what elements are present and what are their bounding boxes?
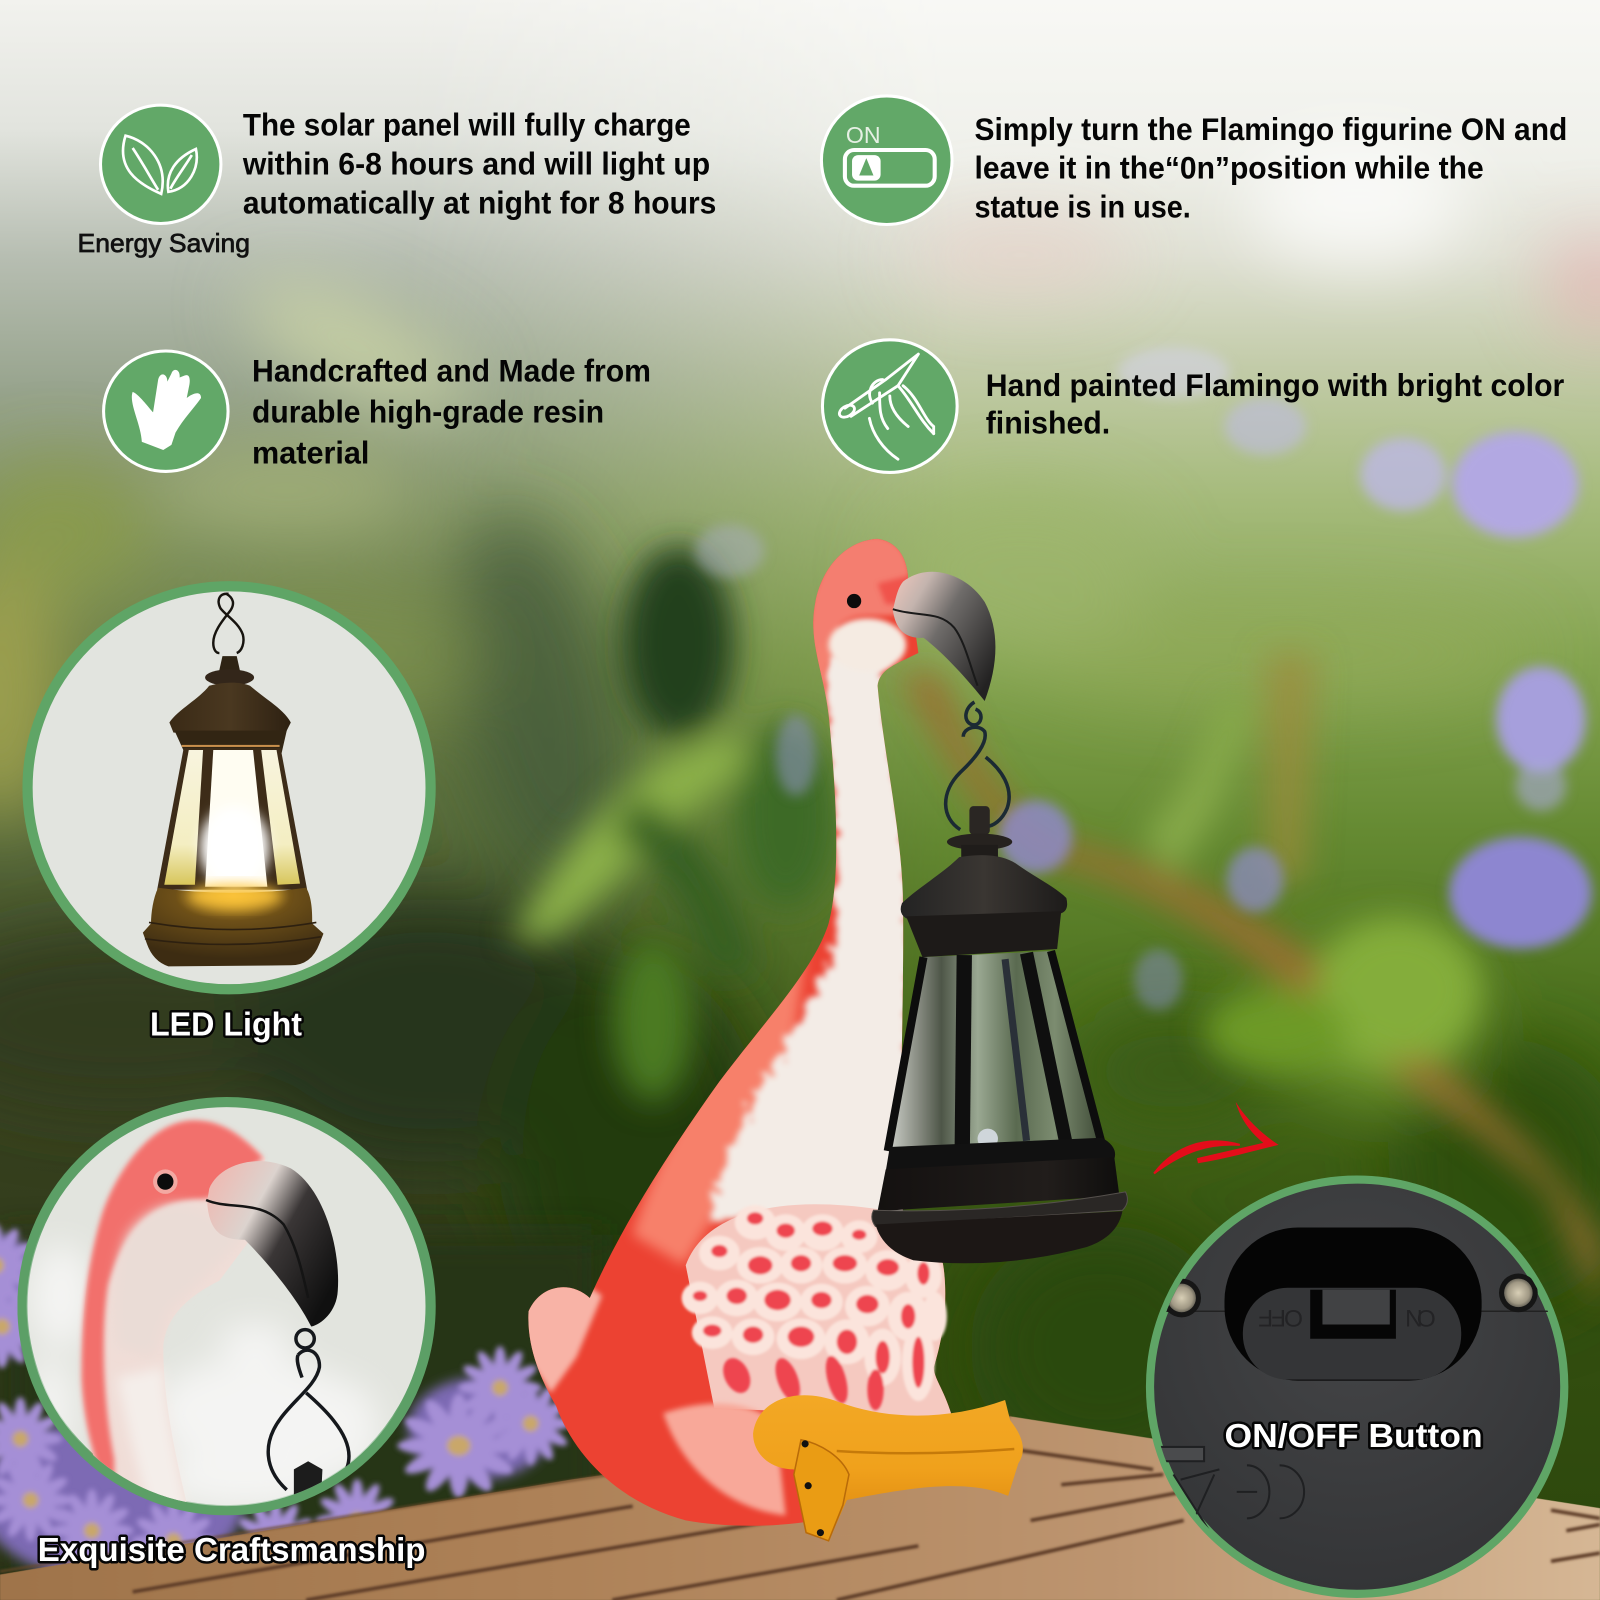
icon: glove: [104, 351, 228, 471]
handcrafted text: [252, 353, 651, 470]
handcrafted text: durable high-grade resin: [252, 393, 604, 429]
thigh: [663, 1403, 786, 1515]
neck and head: [84, 1150, 265, 1502]
hand painted text: finished.: [986, 405, 1110, 441]
icon: on switch: [821, 96, 952, 224]
icon: on switch: ON: [846, 122, 881, 148]
feature: on switch: [821, 96, 1567, 224]
icon: leaves: [101, 105, 221, 223]
solar charge text: The solar panel will fully charge: [243, 107, 691, 143]
wooden table: [0, 1416, 1600, 1600]
Energy Saving caption: Energy Saving: [78, 230, 250, 258]
CE mark and battery marks: [1158, 1447, 1304, 1531]
screws: [1166, 1278, 1201, 1318]
on switch text: statue is in use.: [974, 188, 1191, 224]
beak close-up: [207, 1161, 338, 1327]
flowers behind table: [0, 1223, 602, 1583]
feature: energy saving: [78, 105, 716, 258]
wing base: [686, 1204, 954, 1418]
mirrored OFF and ON marks: OFF: [1258, 1304, 1303, 1331]
eye: [847, 594, 861, 608]
flamingo statue: [510, 531, 1023, 1541]
solar charge text: within 6-8 hours and will light up: [242, 145, 710, 181]
feature: hand painted: [822, 340, 1564, 472]
hand painted text: [986, 367, 1564, 441]
beak: [893, 572, 995, 701]
mirrored OFF and ON marks: [1259, 1310, 1434, 1327]
hook: [268, 1330, 349, 1493]
switch recess: [1224, 1228, 1482, 1381]
main solar lantern: [872, 702, 1127, 1263]
hand painted text: Hand painted Flamingo with bright color: [986, 367, 1564, 403]
solar charge text: automatically at night for 8 hours: [243, 184, 716, 220]
tail: [520, 1281, 602, 1393]
icon: hand holding brush: [822, 340, 957, 472]
red arrow to button: [1154, 1102, 1279, 1173]
panel: LED light circle: [28, 586, 431, 989]
handcrafted text: Handcrafted and Made from: [252, 353, 651, 389]
flamingo body: [510, 531, 969, 1541]
handcrafted text: material: [252, 434, 369, 470]
panel: flamingo head close-up: [22, 1102, 431, 1520]
hanging lantern lit: [143, 594, 323, 966]
on switch text: Simply turn the Flamingo figurine ON and: [974, 111, 1567, 147]
LED Light label: LED Light: [150, 1007, 302, 1044]
ON/OFF Button label: ON/OFF Button: [1224, 1418, 1483, 1455]
wing feathers: [682, 1205, 947, 1410]
orange feet: [753, 1395, 1023, 1541]
on switch text: [974, 111, 1567, 224]
mirrored OFF and ON marks: ON: [1405, 1304, 1436, 1331]
panel: ON/OFF button close-up: [1148, 1180, 1566, 1594]
head: [813, 538, 908, 648]
feature: handcrafted: [104, 351, 651, 471]
Exquisite Craftsmanship label: Exquisite Craftsmanship: [38, 1532, 426, 1569]
white daisies: [31, 1245, 379, 1508]
solar charge text: [242, 107, 716, 220]
on switch text: leave it in the“0n”position while the: [974, 150, 1484, 186]
